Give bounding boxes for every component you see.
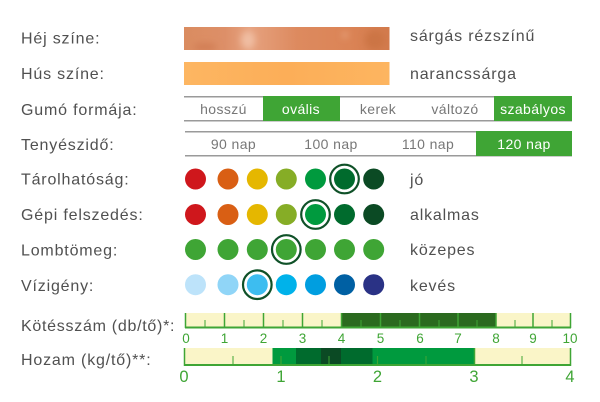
- rating dots: storability: [185, 165, 384, 193]
- scale: fruit set: 10: [562, 331, 578, 346]
- selector: growing period: 120 nap: [497, 136, 551, 152]
- swatch: flesh colour: [184, 62, 390, 85]
- scale: fruit set: 7: [454, 331, 462, 346]
- selector: tuber shape: kerek: [360, 101, 397, 117]
- scale: fruit set: [182, 313, 578, 346]
- labels column: [21, 30, 175, 369]
- value: storability: jó: [409, 172, 424, 189]
- selector: tuber shape: változó: [431, 101, 479, 117]
- scale: fruit set: 2: [260, 331, 267, 346]
- value: flesh colour: narancssárga: [410, 66, 517, 83]
- value: peel colour: sárgás rézszínű: [410, 28, 535, 45]
- selector: tuber shape: ovális: [282, 101, 320, 117]
- label: Hús színe: Hús színe:: [21, 66, 105, 83]
- scale: fruit set: 0: [182, 331, 190, 346]
- label: Gépi felszedés: Gépi felszedés:: [21, 207, 144, 224]
- label: Tenyészidő: Tenyészidő:: [21, 137, 115, 154]
- selector: growing period: 100 nap: [304, 136, 358, 152]
- label: Vízigény: Vízigény:: [21, 278, 94, 295]
- scale: fruit set: 5: [377, 331, 384, 346]
- scale: yield: [179, 348, 575, 386]
- selector: tuber shape: szabályos: [500, 101, 566, 117]
- selector: growing period: [185, 131, 572, 156]
- scale: fruit set: 9: [529, 331, 537, 346]
- label: Hozam: Hozam (kg/tő)**:: [21, 352, 152, 369]
- value: foliage: közepes: [410, 242, 475, 259]
- scale: yield: 0: [179, 368, 189, 386]
- selector: growing period: 110 nap: [402, 136, 454, 152]
- label: Lombtömeg: Lombtömeg:: [21, 242, 118, 260]
- rating dots: water need: [185, 270, 384, 299]
- scale: yield: 2: [373, 368, 382, 386]
- selector: tuber shape: hosszú: [200, 101, 247, 117]
- label: Gumó formája: Gumó formája:: [21, 102, 137, 119]
- scale: yield: 1: [276, 368, 286, 386]
- rating dots: machine harvest: [185, 200, 384, 229]
- value: water need: kevés: [410, 278, 456, 295]
- value: machine harvest: alkalmas: [410, 207, 480, 224]
- label: Kötésszám: Kötésszám (db/tő)*:: [21, 318, 175, 335]
- rating dots: foliage: [185, 235, 384, 264]
- selector: growing period: 90 nap: [211, 136, 256, 152]
- label: Héj színe: Héj színe:: [21, 30, 100, 47]
- scale: fruit set: 8: [492, 331, 500, 346]
- selector: tuber shape: [184, 96, 572, 122]
- scale: fruit set: 3: [299, 331, 306, 346]
- scale: fruit set: 6: [416, 331, 424, 346]
- scale: yield: 4: [565, 368, 575, 386]
- scale: yield: 3: [469, 368, 479, 386]
- swatch: peel colour: [184, 27, 390, 51]
- scale: fruit set: 4: [338, 331, 346, 346]
- label: Tárolhatóság: Tárolhatóság:: [21, 172, 130, 188]
- scale: fruit set: 1: [221, 331, 228, 346]
